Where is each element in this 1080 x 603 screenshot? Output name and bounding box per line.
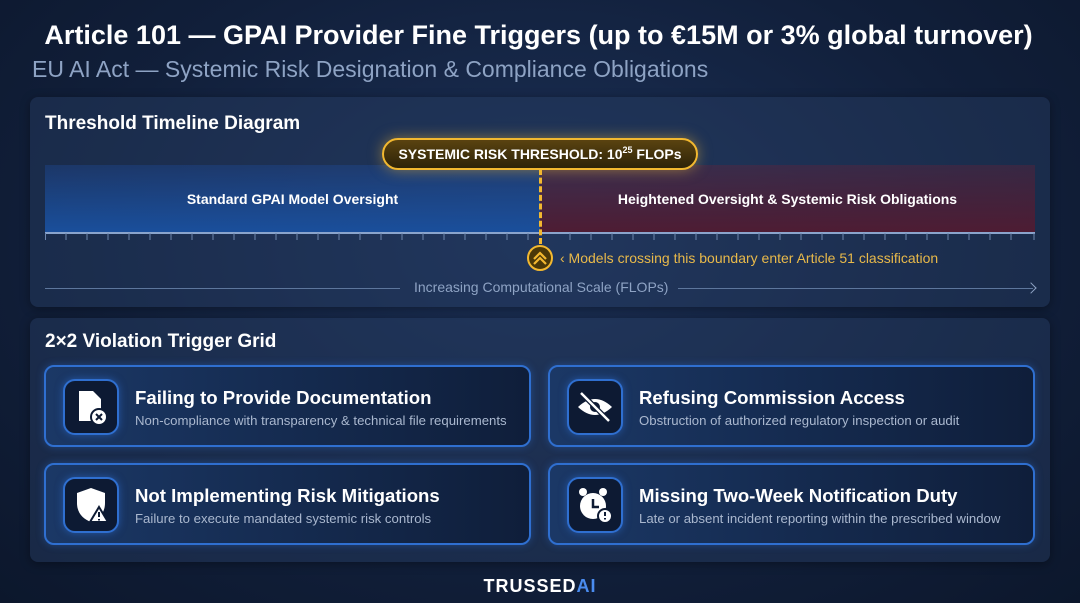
- annotation: ‹ Models crossing this boundary enter Article 51 classification: [560, 250, 938, 266]
- band: standard: Standard GPAI Model Oversight: [187, 191, 398, 207]
- card: risk mitigations: Not Implementing Risk Mitigations: [135, 485, 440, 506]
- panel: violation grid: [30, 318, 1050, 562]
- axis label arrow: [45, 279, 1037, 295]
- icon: alarm clock: [567, 477, 623, 533]
- band: standard: [45, 165, 540, 233]
- footer logo: TRUSSEDAI: [483, 576, 596, 596]
- dashed threshold line: [539, 169, 542, 244]
- card: documentation: [44, 365, 531, 447]
- card: documentation: Non-compliance with transparency & technical file requirements: [135, 413, 507, 428]
- card: risk mitigations: Failure to execute mandated systemic risk controls: [135, 511, 431, 526]
- band: heightened: Heightened Oversight & Systemic Risk Obligations: [618, 191, 957, 207]
- card: notification duty: Missing Two-Week Notification Duty: [639, 485, 958, 506]
- card: notification duty: [548, 463, 1035, 545]
- axis with ticks: [45, 232, 1035, 240]
- icon: eye slash: [567, 379, 623, 435]
- panel: threshold timeline: [30, 97, 1050, 307]
- subtitle: EU AI Act — Systemic Risk Designation & Compliance Obligations: [32, 56, 708, 82]
- card: risk mitigations: [44, 463, 531, 545]
- icon: shield warning: [63, 477, 119, 533]
- card: commission access: [548, 365, 1035, 447]
- card: documentation: Failing to Provide Documentation: [135, 387, 431, 408]
- threshold pill: [382, 138, 698, 170]
- axis label arrow: Increasing Computational Scale (FLOPs): [414, 279, 668, 295]
- icon: document x: [63, 379, 119, 435]
- card: commission access: Refusing Commission Access: [639, 387, 905, 408]
- title: Article 101 — GPAI Provider Fine Triggers (up to €15M or 3% global turnover): [44, 20, 1033, 50]
- threshold pill: SYSTEMIC RISK THRESHOLD: 1025 FLOPs: [398, 145, 682, 162]
- icon: upward chevrons: [527, 245, 553, 271]
- heading: Threshold Timeline Diagram: [45, 113, 300, 134]
- card: notification duty: Late or absent incident reporting within the prescribed window: [639, 511, 1000, 526]
- band: heightened: [540, 165, 1035, 233]
- card: commission access: Obstruction of authorized regulatory inspection or audit: [639, 413, 959, 428]
- heading: 2×2 Violation Trigger Grid: [45, 331, 276, 352]
